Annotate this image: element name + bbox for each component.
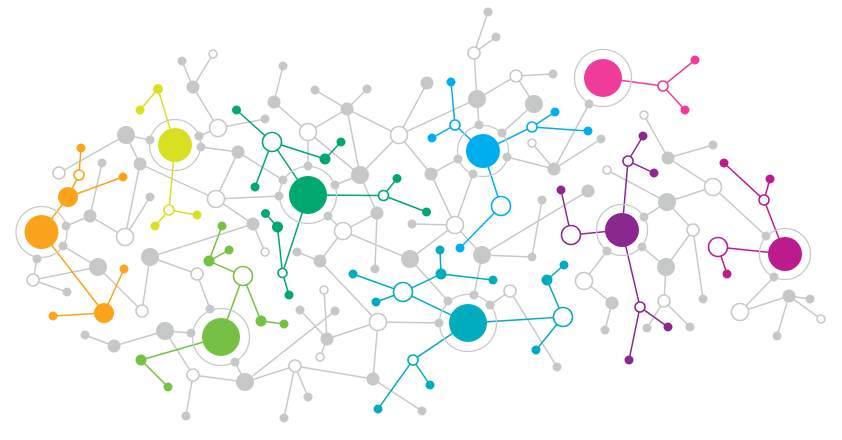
cluster: pink bbox=[574, 50, 700, 114]
cluster: sky blue bbox=[428, 78, 592, 252]
cluster: emerald green bbox=[232, 106, 431, 300]
cluster: orange bbox=[16, 144, 128, 323]
cluster: magenta bbox=[708, 158, 810, 280]
cluster: yellow bbox=[136, 84, 202, 230]
cluster: teal bbox=[348, 246, 572, 414]
cluster: purple bbox=[556, 132, 672, 364]
gray hollow nodes bbox=[27, 47, 825, 381]
cluster: light green bbox=[136, 222, 288, 392]
